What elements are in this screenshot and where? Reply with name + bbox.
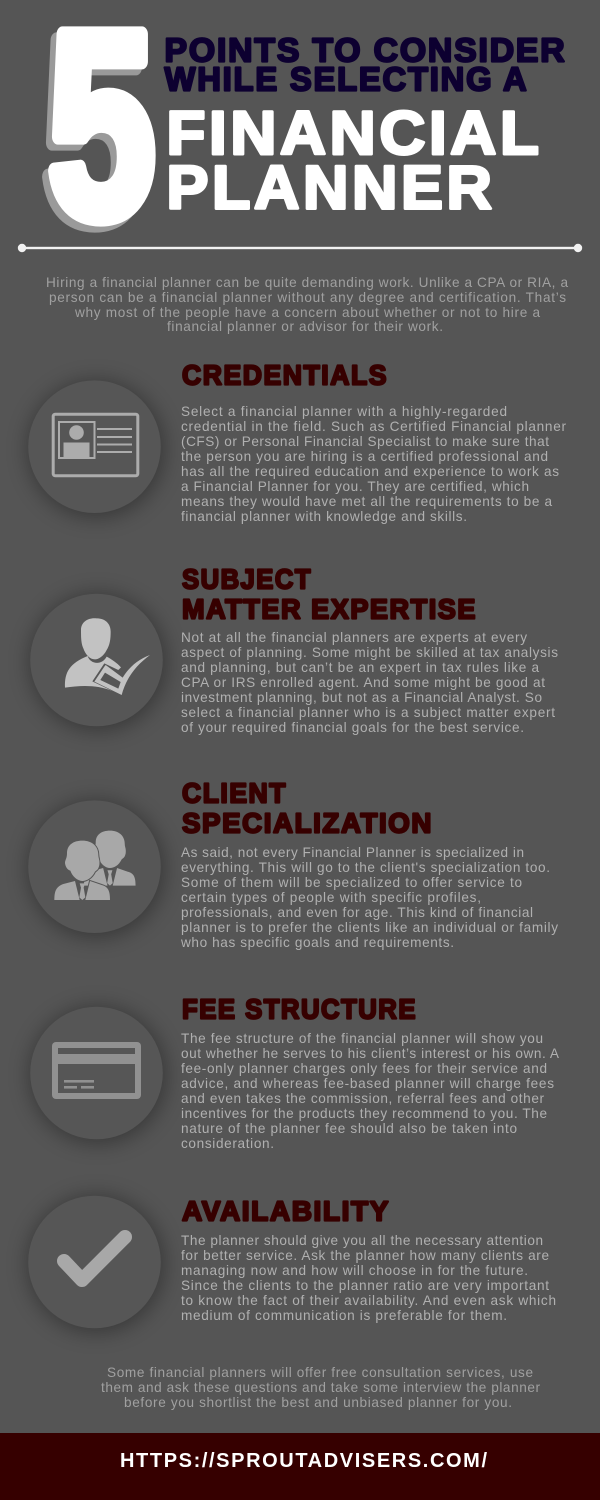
text: credentials body: a Financial Planner for you. They are certified, which [181,479,529,494]
text: availability body: Since the clients to the planner ratio are very important [181,1278,549,1293]
footer band with website address: HTTPS://SPROUTADVISERS.COM/ [120,1450,487,1472]
text: subject matter body [181,630,558,735]
text: credentials body: means they would have met all the requirements to be a [181,494,552,509]
heading: points to consider: POINTS TO CONSIDER [164,32,566,69]
text: client specialization body: As said, not every Financial Planner is specialized in [181,845,524,860]
heading: subject matter expertise [182,564,477,625]
text: fee structure body: The fee structure of the financial planner will show you [181,1031,543,1046]
text: client specialization body: professionals, and even for age. This kind of financial [181,905,533,920]
text: fee structure body: consideration. [181,1136,274,1151]
text: client specialization body: certain types of people with specific profiles, [181,890,481,905]
text: subject matter body: and planning, but can’t be an expert in tax rules like a [181,660,539,675]
text: fee structure body: advice, and whereas fee-based planner will charge fees [181,1076,554,1091]
text: subject matter body: investment planning, but not as a Financial Analyst. So [181,690,542,705]
divider line with dots [18,244,582,252]
heading: availability: AVAILABILITY [182,1196,390,1227]
closing text: them and ask these questions and take some interview the planner [101,1380,540,1395]
text: credentials body: Select a financial planner with a highly-regarded [181,404,507,419]
icon: credit card [30,1007,166,1143]
text: fee structure body: and even takes the commission, referral fees and other [181,1091,544,1106]
heading: client specialization [182,778,433,839]
text: fee structure body: incentives for the products they recommend to you. The [181,1106,547,1121]
intro text [46,275,568,334]
text: subject matter body: Not at all the financial planners are experts at every [181,630,527,645]
heading: fee structure: FEE STRUCTURE [182,994,417,1025]
text: credentials body: the person you are hiring is a certified professional and [181,449,548,464]
text: availability body [181,1233,556,1323]
text: availability body: medium of communication is preferable for them. [181,1308,507,1323]
text: fee structure body [181,1031,560,1151]
heading: financial planner [166,99,542,221]
icon: check mark [28,1196,164,1332]
heading: client specialization: SPECIALIZATION [182,808,433,839]
heading: financial planner: PLANNER [166,153,496,221]
panel: fee structure [30,994,560,1151]
closing text [101,1365,540,1410]
intro text: Hiring a financial planner can be quite demanding work. Unlike a CPA or RIA, a [46,275,568,290]
text: credentials body: credential in the field. Such as Certified Financial planner [181,419,566,434]
text: client specialization body [180,845,558,950]
text: availability body: managing now and how will choose in for the future. [181,1263,528,1278]
text: subject matter body: of your required financial goals for the best service. [181,720,524,735]
intro text: person can be a financial planner without any degree and certification. That’s [49,290,566,305]
heading: financial planner: FINANCIAL [166,99,542,167]
text: client specialization body: planner is to prefer the clients like an individual or family [181,920,558,935]
heading: client specialization: CLIENT [182,778,287,809]
closing text: before you shortlist the best and unbiased planner for you. [124,1395,512,1410]
text: credentials body: has all the required education and experience to work as [181,464,559,479]
text: fee structure body: fee-only planner charges only fees for their service and [181,1061,547,1076]
panel: availability [28,1196,556,1332]
text: availability body: for better service. Ask the planner how many clients are [181,1248,549,1263]
text: client specialization body: everything. This will go to the client's specialization too. [181,860,550,875]
footer band with website address [0,1433,600,1500]
panel: subject matter expertise [30,564,558,735]
text: availability body: The planner should give you all the necessary attention [181,1233,543,1248]
text: fee structure body: nature of the planner fee should also be taken into [181,1121,517,1136]
heading: credentials: CREDENTIALS [182,360,388,391]
panel: credentials [28,360,566,524]
text: subject matter body: aspect of planning. Some might be skilled at tax analysis [181,645,558,660]
heading: points to consider: WHILE SELECTING A [164,61,528,98]
icon: id card [28,380,164,517]
text: credentials body: financial planner with knowledge and skills. [181,509,467,524]
text: subject matter body: CPA or IRS enrolled agent. And some might be good at [181,675,545,690]
intro text: why most of the people have a concern about whether or not to hire a [74,305,540,320]
text: fee structure body: out whether he serves to his client’s interest or his own. A [181,1046,560,1061]
closing text: Some financial planners will offer free consultation services, use [107,1365,533,1380]
title [42,0,566,278]
text: credentials body [181,404,566,524]
text: client specialization body: Some of them will be specialized to offer service to [181,875,522,890]
heading: subject matter expertise: SUBJECT [182,564,312,595]
heading: subject matter expertise: MATTER EXPERTISE [182,594,477,625]
heading: points to consider [164,32,566,98]
text: subject matter body: select a financial planner who is a subject matter expert [181,705,555,720]
icon: two clients [28,800,164,937]
text: credentials body: (CFS) or Personal Financial Specialist to make sure that [181,434,549,449]
panel: client specialization [28,778,558,950]
text: client specialization body: who has specific goals and requirements. [180,935,454,950]
icon: person with check mark [30,594,166,730]
text: availability body: to know the fact of their availability. And even ask which [181,1293,556,1308]
intro text: financial planner or advisor for their work. [167,319,443,334]
